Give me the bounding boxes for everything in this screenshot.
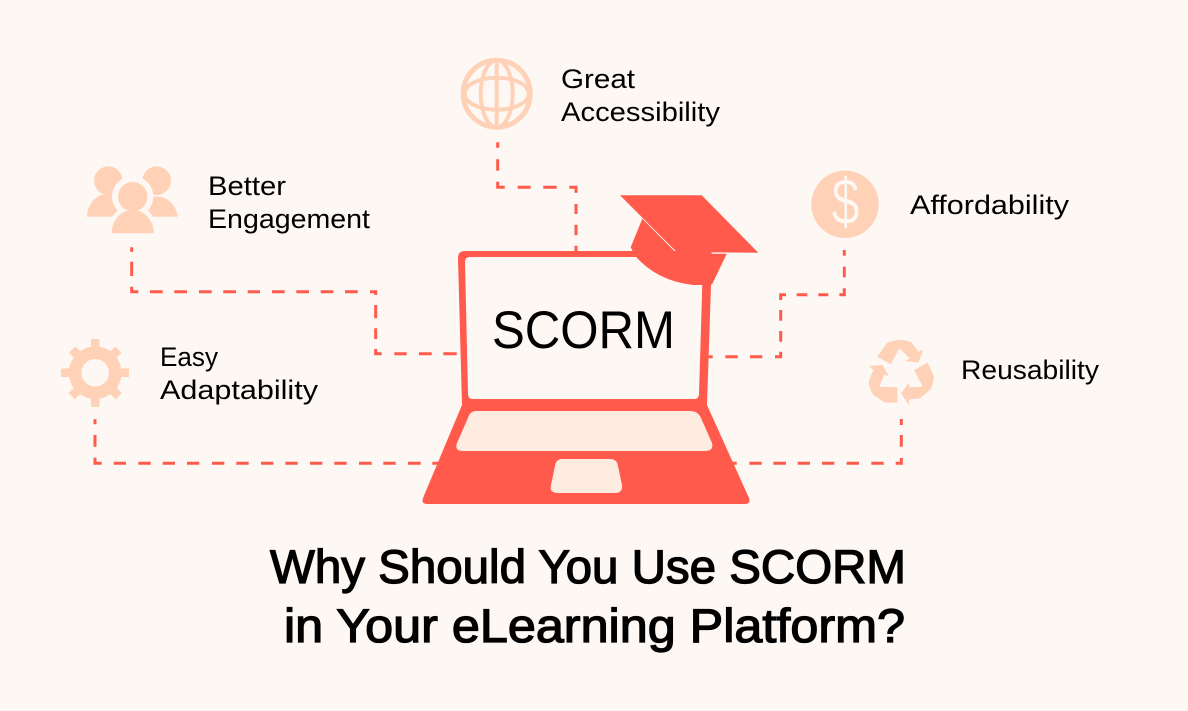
label: Better Engagement: Better [208, 171, 286, 201]
trackpad [551, 459, 622, 493]
icon: graduation cap [620, 195, 758, 285]
label: Easy Adaptability [160, 342, 319, 405]
label: Easy Adaptability: Easy [160, 342, 218, 372]
label: Reusability: Reusability [961, 355, 1100, 385]
icon: gear [61, 339, 129, 407]
label: Affordability: Affordability [910, 190, 1070, 220]
title: Why Should You Use SCORM [270, 540, 906, 593]
icon: laptop [422, 251, 750, 504]
connector: better engagement to laptop [132, 247, 457, 354]
label: Great Accessibility [561, 64, 721, 127]
connector: easy adaptability to laptop [95, 419, 440, 463]
connector: great accessibility to laptop [498, 142, 576, 252]
title: in Your eLearning Platform? [284, 599, 905, 652]
icon: globe [463, 60, 530, 127]
label: Better Engagement [208, 171, 371, 234]
icon: dollar coin [811, 164, 879, 238]
label: Better Engagement: Engagement [208, 204, 371, 234]
label: Easy Adaptability: Adaptability [160, 375, 319, 405]
icon: people [87, 166, 178, 233]
connector: reusability to laptop [728, 419, 901, 463]
icon: recycle [869, 340, 934, 406]
connector: affordability to laptop [706, 250, 844, 357]
icon: dollar coin: $ [832, 164, 860, 238]
title [270, 540, 906, 652]
screen label: SCORM: SCORM [492, 301, 675, 360]
keyboard [456, 411, 712, 451]
label: Great Accessibility: Accessibility [561, 97, 721, 127]
label: Great Accessibility: Great [561, 64, 636, 94]
